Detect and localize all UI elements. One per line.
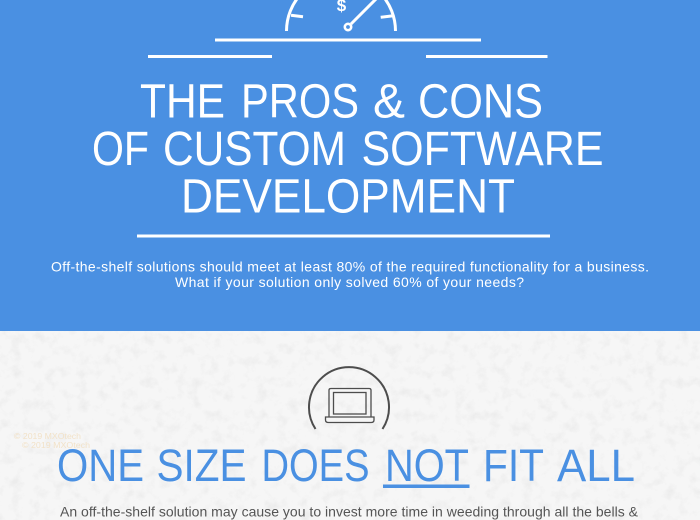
section heading: DOES — [262, 440, 370, 491]
intro text: What if your solution only solved 60% of your needs? — [175, 274, 524, 290]
body text: An off-the-shelf solution may cause you to invest more time in weeding through all the bells & — [60, 504, 639, 520]
rule below title — [137, 234, 550, 238]
section heading: ONE — [57, 440, 144, 491]
panel: textured section — [0, 331, 700, 520]
title: CONS — [418, 76, 543, 128]
panel: blue header — [0, 0, 700, 331]
title: DEVELOPMENT — [181, 170, 515, 224]
icon: speedometer gauge — [286, 0, 396, 31]
section heading: ALL — [557, 440, 635, 491]
title: PROS — [241, 76, 359, 128]
section heading: FIT — [483, 440, 544, 491]
title — [92, 76, 604, 224]
intro text — [51, 258, 649, 290]
title: & — [373, 76, 405, 128]
section heading — [57, 440, 635, 491]
decorative rules above title — [148, 38, 548, 58]
icon: laptop in arc — [309, 367, 389, 429]
title: OF — [92, 123, 149, 176]
watermark — [14, 431, 90, 450]
section heading: NOT — [385, 440, 469, 491]
title: SOFTWARE — [362, 123, 604, 176]
section heading: SIZE — [156, 440, 246, 491]
intro text: Off-the-shelf solutions should meet at least 80% of the required functionality for a business. — [51, 258, 649, 274]
title: CUSTOM — [163, 123, 346, 176]
watermark: © 2019 MXOtech — [14, 431, 81, 441]
watermark: © 2019 MXOtech — [22, 440, 90, 450]
title: THE — [140, 76, 225, 128]
